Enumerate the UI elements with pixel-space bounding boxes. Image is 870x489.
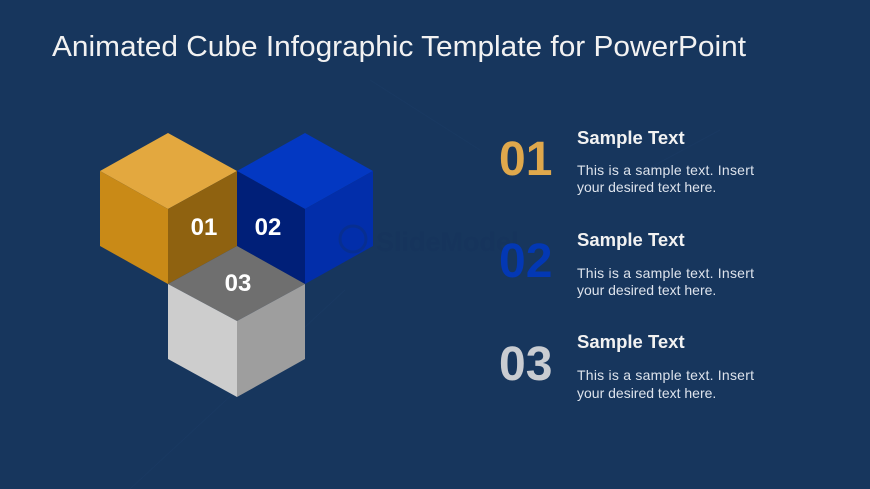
number 02: 02 xyxy=(499,235,552,288)
body 03: your desired text here. xyxy=(577,385,716,401)
body 02: This is a sample text. Insert xyxy=(577,265,754,281)
cube 02: blue xyxy=(237,133,373,284)
heading 03: Sample Text xyxy=(577,331,685,352)
heading 01: Sample Text xyxy=(577,127,685,148)
number 01: 01 xyxy=(499,133,552,186)
item 01 xyxy=(499,127,754,195)
number 03: 03 xyxy=(499,338,552,391)
label 02: 02 xyxy=(255,214,281,241)
cube 01: gold xyxy=(100,133,237,284)
heading 02: Sample Text xyxy=(577,229,685,250)
watermark: SlideModel xyxy=(376,227,519,257)
label 03: 03 xyxy=(225,270,251,297)
item 02 xyxy=(499,229,754,298)
body 01: This is a sample text. Insert xyxy=(577,162,754,178)
body 03: This is a sample text. Insert xyxy=(577,367,754,383)
title: Animated Cube Infographic Template for PowerPoint xyxy=(52,31,746,63)
cube 03: grey xyxy=(168,246,305,397)
item 03 xyxy=(499,331,754,401)
body 02: your desired text here. xyxy=(577,282,716,298)
body 01: your desired text here. xyxy=(577,179,716,195)
label 01: 01 xyxy=(191,214,217,241)
